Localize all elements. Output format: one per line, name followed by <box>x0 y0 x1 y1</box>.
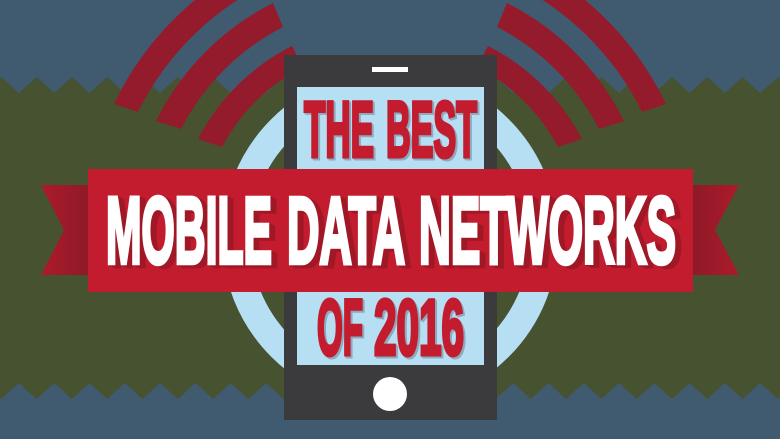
smartphone <box>284 55 497 420</box>
left wave: middle <box>156 3 283 129</box>
signal waves: left <box>114 0 303 147</box>
light blue ring <box>236 84 544 392</box>
right wave: middle <box>497 3 624 129</box>
heading: the best: THE <box>304 84 374 174</box>
banner <box>88 169 693 292</box>
heading: mobile data networks <box>106 178 676 284</box>
phone body <box>284 55 497 420</box>
left wave: inner <box>198 46 303 147</box>
phone speaker <box>372 67 408 72</box>
heading: mobile data networks: MOBILE <box>106 178 272 284</box>
phone home button <box>373 377 407 411</box>
heading: of 2016: 2016 <box>374 282 464 372</box>
right wave: outer <box>506 0 666 112</box>
phone screen <box>297 87 484 365</box>
ribbon tail: right <box>693 185 739 275</box>
heading: of 2016: OF <box>317 282 363 372</box>
infographic canvas: BEST <box>386 84 477 174</box>
signal waves: right <box>477 0 666 147</box>
heading: mobile data networks: DATA <box>287 178 405 284</box>
right wave: inner <box>477 46 582 147</box>
ribbon tail: left <box>41 185 88 275</box>
left wave: outer <box>114 0 274 112</box>
background: green zigzag band <box>0 77 780 399</box>
